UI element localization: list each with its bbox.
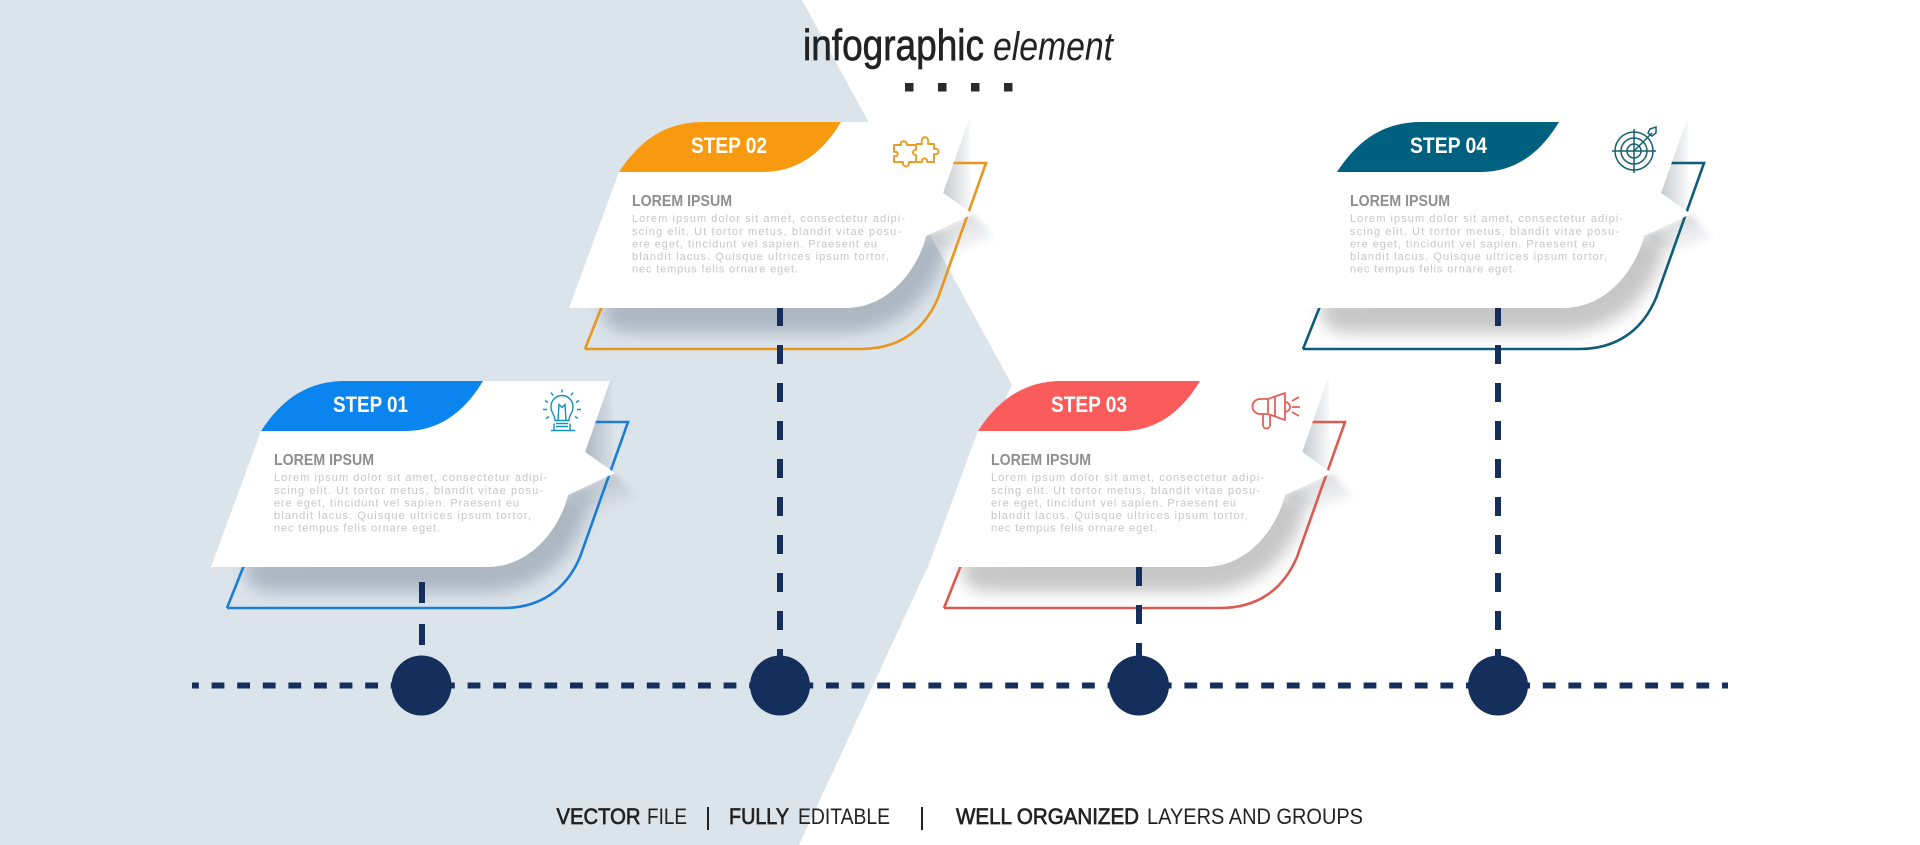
text block: ere eget, tincidunt vel sapien. Praesent eu [991, 498, 1236, 510]
footer text: EDITABLE [798, 804, 890, 829]
footer divider 1 [707, 807, 709, 830]
text block: nec tempus felis ornare eget. [991, 522, 1157, 534]
text block: ere eget, tincidunt vel sapien. Praesent eu [632, 238, 877, 250]
card body [1287, 122, 1691, 308]
step label pill [261, 381, 483, 431]
text block: Lorem ipsum dolor sit amet, consectetur adipi- [274, 472, 547, 484]
text block: blandit lacus. Quisque ultrices ipsum tortor, [1350, 251, 1607, 263]
icon: megaphone [1252, 393, 1300, 428]
notch shadow [926, 214, 994, 253]
step label pill [978, 381, 1200, 431]
timeline node 3 [1109, 656, 1169, 716]
title: element [993, 25, 1115, 69]
icon: light bulb [543, 390, 581, 430]
card body [928, 381, 1332, 567]
timeline node 4 [1468, 656, 1528, 716]
heading: LOREM IPSUM [632, 193, 732, 210]
heading: LOREM IPSUM [991, 452, 1091, 469]
footer text: VECTOR [556, 804, 640, 829]
heading: LOREM IPSUM [274, 452, 374, 469]
timeline dashed line [192, 682, 1728, 688]
text block: ere eget, tincidunt vel sapien. Praesent eu [274, 498, 519, 510]
outline frame [585, 163, 986, 349]
text block: scing elit. Ut tortor metus, blandit vitae posu- [274, 485, 543, 497]
fold shadow [1302, 380, 1330, 472]
text block [1350, 213, 1623, 276]
panel: step 03 [928, 380, 1353, 680]
text block: blandit lacus. Quisque ultrices ipsum tortor, [991, 510, 1248, 522]
heading: LOREM IPSUM [1350, 193, 1450, 210]
notch shadow [1644, 214, 1712, 253]
panel: step 04 [1287, 121, 1712, 666]
text block: scing elit. Ut tortor metus, blandit vitae posu- [1350, 226, 1619, 238]
connector [1495, 299, 1501, 666]
notch shadow [568, 473, 636, 512]
footer text: FILE [647, 804, 687, 829]
panel: step 01 [211, 380, 636, 645]
text block [274, 472, 547, 534]
text block: nec tempus felis ornare eget. [274, 522, 440, 534]
text block: scing elit. Ut tortor metus, blandit vitae posu- [991, 485, 1260, 497]
fold shadow [585, 380, 613, 472]
text block: blandit lacus. Quisque ultrices ipsum tortor, [632, 251, 889, 263]
card shadow [603, 236, 950, 333]
timeline node 1 [392, 656, 452, 716]
title dots [905, 83, 1012, 92]
text block: scing elit. Ut tortor metus, blandit vitae posu- [632, 226, 901, 238]
timeline node 2 [750, 656, 810, 716]
fold shadow [1661, 121, 1689, 213]
step label: STEP 02 [691, 133, 767, 158]
footer text: LAYERS AND GROUPS [1147, 804, 1363, 829]
notch shadow [1285, 473, 1353, 512]
text block: Lorem ipsum dolor sit amet, consectetur adipi- [632, 213, 905, 225]
fold shadow [943, 121, 971, 213]
text block: nec tempus felis ornare eget. [632, 264, 798, 276]
background: grey angled panel [0, 0, 1012, 845]
card shadow [245, 495, 592, 592]
outline frame [227, 422, 628, 608]
text block: Lorem ipsum dolor sit amet, consectetur adipi- [991, 472, 1264, 484]
panel: step 02 [569, 121, 994, 668]
footer text: FULLY [729, 804, 789, 829]
step label pill [1337, 122, 1559, 172]
title: infographic [803, 21, 984, 70]
icon: target [1612, 127, 1656, 173]
text block: Lorem ipsum dolor sit amet, consectetur adipi- [1350, 213, 1623, 225]
step label: STEP 03 [1051, 392, 1127, 417]
card body [211, 381, 615, 567]
text block: ere eget, tincidunt vel sapien. Praesent eu [1350, 238, 1595, 250]
title [803, 21, 1115, 70]
step label pill [619, 122, 841, 172]
card shadow [962, 495, 1309, 592]
text block: blandit lacus. Quisque ultrices ipsum tortor, [274, 510, 531, 522]
connector [419, 582, 425, 645]
connector [1136, 567, 1142, 680]
card body [569, 122, 973, 308]
outline frame [1303, 163, 1704, 349]
text block [632, 213, 905, 276]
connector [777, 307, 783, 668]
text block [991, 472, 1264, 534]
footer divider 2 [921, 807, 923, 830]
text block: nec tempus felis ornare eget. [1350, 264, 1516, 276]
icon: puzzle pieces [894, 137, 938, 166]
footer text: WELL ORGANIZED [956, 804, 1139, 829]
footer text [556, 804, 1363, 829]
outline frame [944, 422, 1345, 608]
step label: STEP 01 [333, 392, 408, 417]
step label: STEP 04 [1410, 133, 1488, 158]
card shadow [1321, 236, 1668, 333]
